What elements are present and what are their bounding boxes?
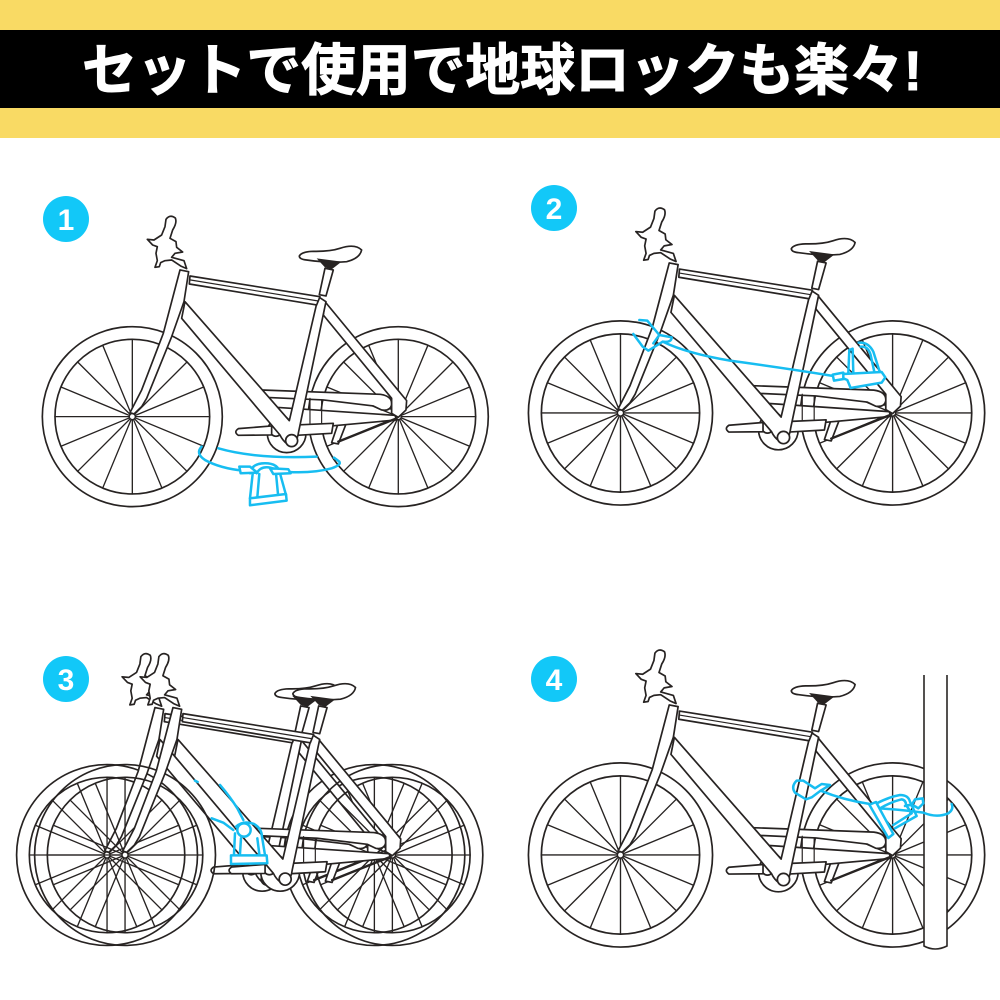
lock and cable 4 [793, 781, 952, 838]
header band: black bar [0, 30, 1000, 108]
header band: yellow background [0, 0, 1000, 138]
lock and cable 1 [199, 447, 340, 505]
number badge 2: 2 [546, 193, 562, 226]
bicycle 4 [528, 650, 985, 947]
bicycle 1 [42, 216, 488, 507]
bicycle 2 [528, 208, 985, 505]
lock and cable 2 [633, 320, 885, 388]
number badge 3: 3 [58, 664, 74, 697]
bicycle 3: front [35, 654, 483, 945]
panel: step 2 [528, 185, 985, 505]
number badge 1 [43, 196, 89, 242]
number badge 4: 4 [546, 664, 563, 697]
bicycle 3: back [17, 654, 465, 945]
lock and cable 3 [195, 781, 267, 864]
number badge 4 [531, 656, 577, 702]
panel: step 3 [17, 654, 483, 945]
panel: step 4 [528, 650, 985, 949]
panel: step 1 [42, 196, 488, 507]
number badge 1: 1 [58, 204, 74, 237]
title: セットで使用で地球ロックも楽々! [82, 39, 922, 102]
number badge 2 [531, 185, 577, 231]
pole [924, 675, 947, 949]
number badge 3 [43, 656, 89, 702]
